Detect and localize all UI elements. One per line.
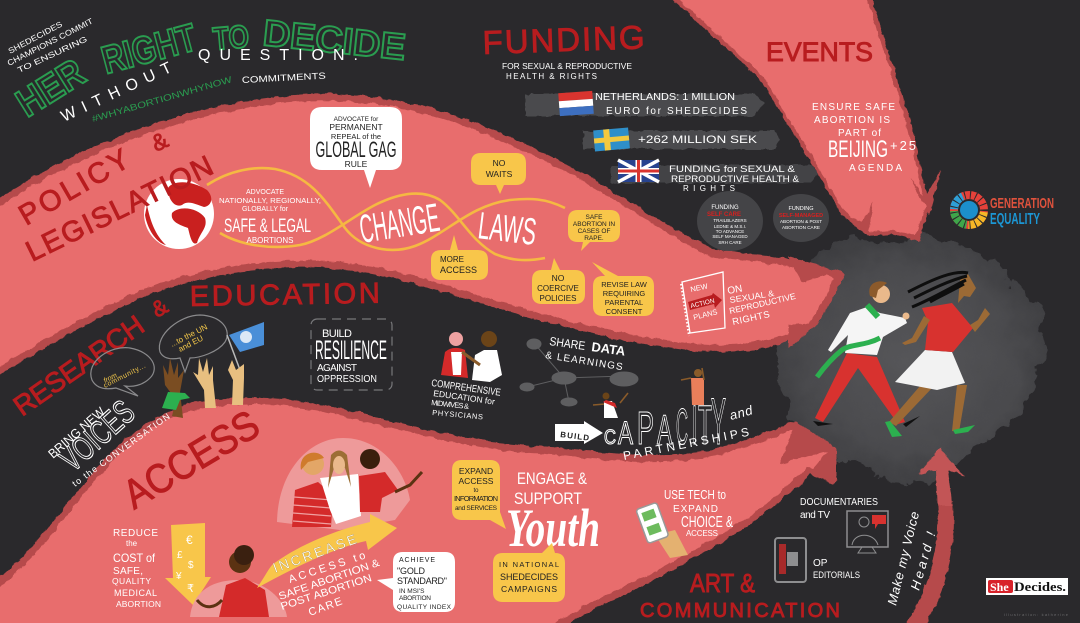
- icon: three friends: [277, 438, 422, 530]
- credit: illustration: katherine: [1004, 612, 1069, 617]
- text: bring new voices to the conversation: [45, 393, 172, 489]
- text: ensure safe abortion: +25: [890, 138, 916, 153]
- icon: woman with afro: [190, 545, 287, 617]
- text: engage and support youth: Youth: [506, 498, 600, 558]
- callout: more access: ACCESS: [440, 265, 477, 275]
- callout: revise law requiring parental consent: REVISE LAW: [601, 280, 648, 289]
- icon: globe: [144, 179, 214, 249]
- central grey cloud: [776, 237, 1045, 480]
- logo: generation equality: [954, 195, 1054, 228]
- heading: research & education: &: [147, 293, 172, 322]
- text: ensure safe abortion: AGENDA: [849, 163, 902, 174]
- bubble: from community: [91, 348, 154, 396]
- subheading: HEALTH & RIGHTS: [506, 72, 597, 81]
- circle: funding self managed: SELF-MANAGED: [779, 213, 823, 219]
- arrow: cost decreasing: £: [177, 550, 183, 561]
- callout: safe abortion in cases of rape: [568, 210, 620, 251]
- heading: her right to decide: TO: [211, 18, 250, 57]
- callout: national shedecides campaigns: IN NATIONAL: [499, 560, 559, 569]
- text: reduce the cost: the: [126, 539, 138, 548]
- circle: funding self managed: ABORTION CARE: [782, 225, 820, 230]
- icon: runner woman: [885, 272, 990, 437]
- logo: she decides: [986, 578, 1068, 595]
- text: ensure safe abortion: ABORTION IS: [814, 115, 890, 126]
- panel: research and education contents: RESILIENCE: [315, 335, 387, 365]
- text: access to safe abortion: ACCESS to: [287, 550, 367, 586]
- text: use tech to expand choice: CHOICE &: [681, 514, 733, 531]
- callout: safe abortion in cases of rape: CASES OF: [578, 228, 610, 235]
- heading: without question: [59, 47, 358, 126]
- box: build resilience against oppression: AGAINST: [317, 363, 357, 374]
- text: share data and learnings: DATA: [591, 339, 627, 359]
- text: op editorials: [813, 558, 860, 581]
- icon: sweden flag: [593, 127, 630, 151]
- callout: no waits: [471, 153, 526, 194]
- text: op editorials: OP: [813, 558, 828, 569]
- text: reduce the cost: ABORTION: [116, 599, 161, 609]
- callout: no coercive policies: COERCIVE: [537, 284, 579, 293]
- text: laws: LAWS: [476, 205, 539, 254]
- icon: woman in orange: [681, 368, 704, 405]
- text: access to safe abortion: POST ABORTION: [279, 572, 373, 613]
- arrow: cost decreasing: ¥: [175, 571, 182, 582]
- callout: global gag rule: [310, 107, 402, 188]
- text: bring new voices to the conversation: VOICES: [53, 393, 142, 479]
- text: on sexual and reproductive rights: REPRODUCTIVE: [728, 291, 797, 316]
- heading: her right to decide: RIGHT: [97, 16, 201, 83]
- hashtag and commitments: [91, 71, 326, 124]
- heading: art & communication: COMMUNICATION: [640, 600, 840, 622]
- icon: runner man: [813, 281, 920, 427]
- text: capacity: C: [604, 426, 616, 449]
- text: ensure safe abortion: BEIJING: [828, 136, 888, 163]
- callout: global gag rule: RULE: [345, 159, 368, 169]
- text: reduce the cost: [112, 528, 161, 609]
- wave: change laws: [207, 168, 565, 260]
- icon: raised hands and un flag: [162, 322, 264, 418]
- panel: access band: [0, 401, 834, 623]
- bubble: to the un and eu: ...to the UN: [169, 322, 209, 349]
- text: ensure safe abortion: [812, 102, 916, 174]
- heading: access: ACCESS: [115, 401, 267, 518]
- text: capacity: C: [676, 398, 688, 455]
- panel: research and education contents: Y: [711, 384, 726, 458]
- bubble: to the un and eu: and EU: [177, 334, 205, 354]
- text: capacity: A: [657, 406, 672, 453]
- callout: revise law requiring parental consent: CONSENT: [606, 307, 643, 316]
- panel: policy contents: [14, 107, 797, 336]
- icon: phone in hand: [636, 502, 688, 558]
- text: advocate for safe and legal abortions: GLOBALLY for: [242, 206, 289, 213]
- hashtag and commitments: COMMITMENTS: [242, 71, 326, 85]
- text: comprehensive education: EDUCATION for: [433, 388, 496, 407]
- intro text: CHAMPIONS COMMIT: [6, 17, 95, 68]
- text: capacity: A: [618, 415, 633, 451]
- text: documentaries and tv: and TV: [800, 510, 830, 521]
- icon: new action plans notebook: [681, 272, 725, 336]
- icon: tv monitor: [847, 511, 888, 553]
- intro text: SHEDECIDES: [7, 20, 64, 56]
- text: make my voice heard: Make my Voice: [884, 510, 922, 607]
- callout: gold standard: QUALITY INDEX: [397, 604, 452, 611]
- arrow: cost decreasing: $: [188, 560, 194, 571]
- icon: new action plans notebook: NEW: [690, 281, 709, 294]
- panel: research and education contents: [8, 278, 755, 489]
- text: advocate for safe and legal abortions: NATIONALLY, REGIONALLY,: [219, 198, 321, 205]
- strip: sweden: [583, 127, 780, 151]
- callout: no coercive policies: [532, 258, 585, 304]
- callout: no waits: WAITS: [486, 169, 513, 179]
- heading: research & education: EDUCATION: [190, 278, 380, 313]
- icon: midwife and physician: [441, 331, 502, 382]
- circle: funding self managed: [773, 194, 829, 242]
- text: use tech to expand choice: ACCESS: [686, 529, 718, 538]
- strip: netherlands: [525, 91, 764, 117]
- text: share data and learnings: [545, 334, 627, 373]
- bubble: to the un and eu: [159, 315, 227, 372]
- callout: safe abortion in cases of rape: RAPE.: [584, 235, 604, 242]
- panel: art and communication: [640, 497, 939, 622]
- callout: expand access: ACCESS: [459, 476, 494, 486]
- circle: funding self care: TRAILBLAZERS: [713, 218, 747, 223]
- box: build resilience against oppression: [311, 319, 392, 390]
- text: make my voice heard: [884, 510, 939, 607]
- heading: her right to decide: HER: [9, 51, 93, 126]
- icon: uk flag: [618, 160, 659, 182]
- callout: gold standard: ABORTION: [399, 595, 431, 602]
- circle: funding self care: [697, 191, 763, 251]
- hashtag and commitments: #WHYABORTIONWHYNOW: [91, 74, 234, 124]
- text: and partnerships: PARTNERSHIPS: [622, 425, 750, 463]
- icon: netherlands flag: [558, 91, 594, 116]
- text: documentaries and tv: DOCUMENTARIES: [800, 497, 878, 508]
- callout: safe abortion in cases of rape: ABORTION IN: [573, 221, 615, 228]
- arrow: increase: [257, 514, 397, 588]
- circle: funding self managed: ABORTION & POST: [780, 219, 822, 224]
- icon: new action plans notebook: PLANS: [692, 307, 718, 322]
- circle: funding self care: SELF CARE: [707, 212, 741, 218]
- text: bring new voices to the conversation: to the CONVERSATION: [70, 411, 172, 489]
- callout: expand access: to: [473, 488, 479, 494]
- text: op editorials: EDITORIALS: [813, 570, 860, 581]
- callout: expand access: and SERVICES: [455, 505, 498, 512]
- text: reduce the cost: REDUCE: [113, 528, 158, 539]
- text: capacity: I: [692, 393, 697, 456]
- text: reduce the cost: QUALITY: [112, 576, 151, 586]
- callout: no waits: NO: [493, 158, 506, 168]
- text: make my voice heard: Heard !: [907, 530, 939, 592]
- arrow label: build: [555, 421, 603, 444]
- friend: left, striped top: [292, 453, 333, 527]
- callout: more access: MORE: [440, 255, 464, 264]
- text: ensure safe abortion: PART of: [838, 128, 881, 139]
- heading: art & communication: ART &: [690, 568, 755, 598]
- text: bring new voices to the conversation: BRING NEW: [45, 404, 108, 461]
- icon: network of data: [520, 339, 638, 406]
- text: use tech to expand choice: [664, 487, 733, 538]
- heading: art & communication: [640, 568, 840, 622]
- icon: newspaper tablet: [775, 538, 806, 582]
- heading: without question: QUESTION.: [198, 47, 358, 64]
- callout: more access: [431, 235, 488, 280]
- arrowhead barbs: [788, 256, 840, 348]
- text: reduce the cost: COST of: [113, 551, 156, 565]
- icon: new action plans notebook: ACTION: [690, 298, 716, 310]
- callout: gold standard: ACHIEVE: [399, 557, 435, 564]
- bubble: from community: community...: [103, 363, 147, 390]
- strip: uk: REPRODUCTIVE HEALTH &: [671, 174, 799, 184]
- panel: access contents: [112, 401, 733, 619]
- text: and partnerships: [622, 402, 755, 463]
- circle: funding self care: TO ADVANCE: [716, 229, 744, 234]
- title block: [6, 12, 408, 126]
- callout: revise law requiring parental consent: PARENTAL: [605, 298, 643, 307]
- callout: revise law requiring parental consent: [592, 262, 654, 316]
- callout: global gag rule: REPEAL of the: [331, 132, 381, 141]
- friend: right, red top: [359, 449, 422, 512]
- text: engage and support youth: [506, 469, 600, 558]
- text: on sexual and reproductive rights: [727, 284, 797, 328]
- box: build resilience against oppression: OPPRESSION: [317, 374, 377, 385]
- strip: netherlands: EURO for SHEDECIDES: [606, 106, 747, 117]
- heading: without question: WITHOUT: [59, 59, 175, 126]
- callout: no coercive policies: POLICIES: [540, 294, 576, 303]
- heading: funding: FUNDING: [482, 18, 645, 61]
- circle: funding self care: FUNDING: [711, 205, 739, 211]
- panel: policy contents: CHANGE: [357, 196, 442, 252]
- arrow: cost decreasing: €: [186, 533, 193, 547]
- panel: funding: [482, 18, 829, 251]
- arrow: cost decreasing: ₹: [187, 583, 194, 595]
- text: advocate for safe and legal abortions: [219, 189, 321, 245]
- text: ensure safe abortion: ENSURE SAFE: [812, 102, 895, 113]
- logo: generation equality: EQUALITY: [990, 211, 1040, 228]
- circle: funding self care: SRH CARE: [718, 240, 742, 245]
- callout: gold standard: "GOLD: [397, 566, 426, 576]
- text: documentaries and tv: [800, 497, 878, 521]
- text: engage and support youth: ENGAGE &: [517, 469, 588, 488]
- text: share data and learnings: SHARE: [549, 334, 586, 353]
- panel: events text: [766, 37, 916, 174]
- text: share data and learnings: & LEARNINGS: [545, 350, 624, 373]
- heading: research & education: RESEARCH: [8, 309, 150, 422]
- text: access to safe abortion: [277, 550, 381, 619]
- callout: safe abortion in cases of rape: SAFE: [586, 214, 603, 221]
- text: access to safe abortion: CARE: [307, 596, 344, 619]
- subheading: [502, 62, 632, 81]
- circle: funding self managed: FUNDING: [788, 206, 814, 212]
- callout: gold standard: [377, 552, 455, 612]
- strip: uk: RIGHTS: [683, 184, 735, 193]
- text: use tech to expand choice: EXPAND: [673, 504, 718, 515]
- callout: no coercive policies: NO: [552, 273, 565, 283]
- callout: expand access: INFORMATION: [454, 494, 498, 503]
- strip: uk: [611, 160, 818, 193]
- text: and partnerships: and: [728, 402, 755, 423]
- text: capacity: [604, 384, 726, 458]
- heading: policy & legislation: LEGISLATION: [21, 150, 218, 268]
- callout: global gag rule: PERMANENT: [329, 122, 383, 132]
- text: comprehensive education: PHYSICIANS: [432, 408, 483, 421]
- arrow: increase: INCREASE: [271, 531, 359, 576]
- panel: policy and legislation band: [0, 97, 840, 377]
- text: on sexual and reproductive rights: RIGHTS: [731, 309, 771, 328]
- heading: events: EVENTS: [766, 37, 873, 67]
- logo: she decides: She: [990, 580, 1009, 594]
- heading: research & education: [8, 278, 380, 422]
- callout: revise law requiring parental consent: REQUIRING: [603, 289, 645, 298]
- text: comprehensive education: COMPREHENSIVE: [431, 378, 502, 399]
- callout: national shedecides campaigns: CAMPAIGNS: [501, 584, 557, 594]
- circle: funding self care: SELF MANAGED: [712, 234, 748, 239]
- text: capacity: T: [698, 393, 712, 456]
- text: capacity: P: [637, 402, 654, 454]
- circle: funding self care: LEDNE & M.S.I.: [714, 224, 746, 229]
- friend: centre, white top: [320, 450, 361, 524]
- callout: expand access: EXPAND: [459, 466, 493, 476]
- heading: policy & legislation: &: [147, 126, 172, 157]
- arrow: art and communication: [902, 448, 964, 623]
- arrowhead barbs: [843, 170, 941, 233]
- callout: global gag rule: ADVOCATE for: [334, 116, 379, 123]
- strip: uk: FUNDING for SEXUAL &: [669, 164, 796, 175]
- intro text: [6, 17, 95, 75]
- arrow label: build: BUILD: [560, 430, 590, 443]
- arrowhead barbs: [780, 423, 834, 482]
- callout: national shedecides campaigns: [493, 543, 565, 602]
- text: advocate for safe and legal abortions: ABORTIONS: [247, 236, 293, 245]
- text: comprehensive education: MIDWIVES &: [431, 398, 470, 411]
- callout: national shedecides campaigns: SHEDECIDES: [500, 572, 558, 582]
- intro text: TO ENSURING: [16, 35, 89, 75]
- box: build resilience against oppression: BUILD: [322, 328, 352, 340]
- arrow: cost decreasing: [165, 523, 211, 605]
- text: reduce the cost: SAFE,: [113, 566, 143, 577]
- text: on sexual and reproductive rights: ON: [727, 284, 743, 297]
- text: advocate for safe and legal abortions: SAFE & LEGAL: [224, 216, 311, 237]
- heading: her right to decide: [9, 12, 408, 126]
- subheading: FOR SEXUAL & REPRODUCTIVE: [502, 62, 632, 71]
- text: reduce the cost: MEDICAL: [114, 588, 157, 598]
- logo: she decides: Decides.: [1014, 580, 1066, 594]
- text: comprehensive education: [431, 378, 502, 421]
- callout: gold standard: STANDARD": [397, 576, 447, 586]
- callout: expand access: [452, 460, 506, 529]
- strip: netherlands: NETHERLANDS: 1 MILLION: [595, 91, 735, 103]
- bubble: from community: from: [103, 372, 119, 385]
- text: access to safe abortion: SAFE ABORTION &: [277, 557, 381, 603]
- text: use tech to expand choice: USE TECH to: [664, 487, 726, 502]
- text: on sexual and reproductive rights: SEXUAL &: [729, 288, 775, 305]
- callout: global gag rule: GLOBAL GAG: [316, 137, 396, 162]
- callout: gold standard: IN MSI'S: [399, 588, 425, 595]
- strip: sweden: +262 MILLION SEK: [638, 134, 758, 146]
- text: engage and support youth: SUPPORT: [514, 489, 582, 508]
- heading: policy & legislation: POLICY: [14, 143, 135, 232]
- text: advocate for safe and legal abortions: ADVOCATE: [246, 189, 284, 196]
- heading: her right to decide: DECIDE: [261, 12, 408, 68]
- icon: dancing girl: [593, 392, 628, 418]
- panel: events arrow: [668, 0, 941, 238]
